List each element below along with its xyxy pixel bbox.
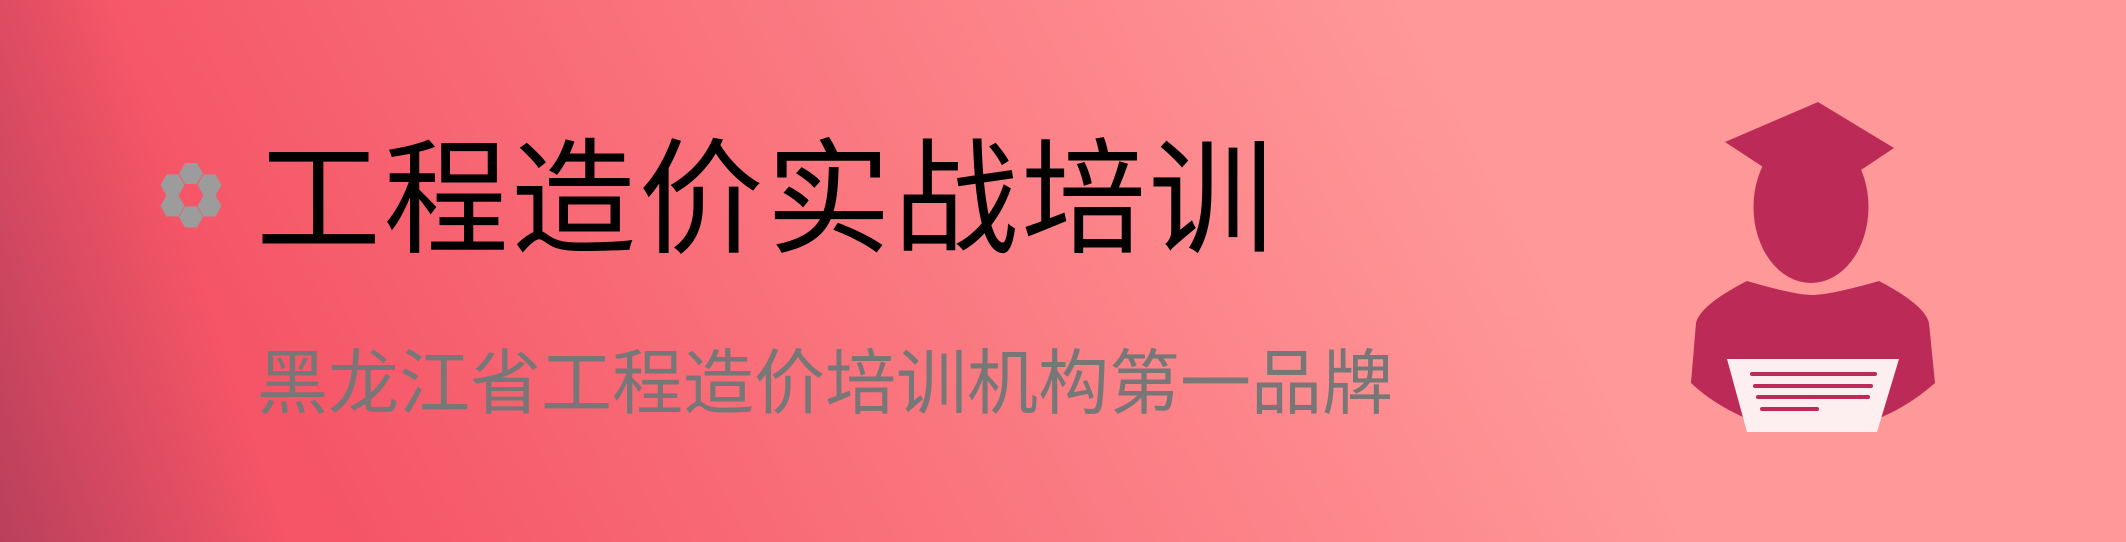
graduate head (1754, 131, 1868, 283)
icon: graduate reading a document (1691, 102, 1935, 432)
document sheet (1727, 359, 1899, 432)
mortarboard cap (1725, 102, 1894, 170)
icon: hexagon flower bullet (160, 163, 222, 228)
graduate body (1691, 281, 1935, 417)
document text lines (1752, 374, 1875, 409)
title: 工程造价实战培训 (256, 131, 1276, 270)
subtitle: 黑龙江省工程造价培训机构第一品牌 (257, 345, 1393, 424)
